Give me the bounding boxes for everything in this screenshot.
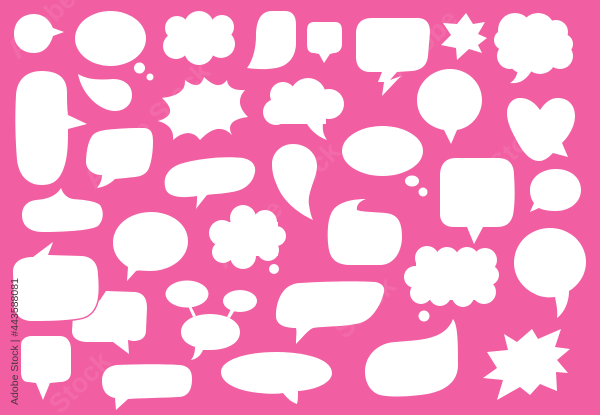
bubble: large left with top tail — [13, 242, 99, 321]
bubble: large cloud with tail — [494, 13, 573, 83]
bubble: rounded rectangle with lower left tail — [86, 128, 153, 188]
bubble: tall pill with right tail — [15, 71, 87, 185]
bubble: cloud centre with tail — [263, 78, 344, 140]
bubble: spiky explosion — [158, 77, 248, 140]
bubble: horizontal thought cloud — [404, 246, 499, 322]
vertical credit text: Adobe Stock | #443588081 — [9, 278, 21, 405]
faint watermark: Stock — [328, 270, 402, 344]
bubbles: linked ellipses — [166, 280, 257, 360]
faint watermark: Adobe Stock — [208, 136, 347, 274]
bubble: wide bubble with tail — [165, 157, 255, 209]
bubble: cloud top — [163, 11, 235, 65]
bubble: round with bottom tail — [417, 69, 482, 144]
bubble: wide bottom pill — [102, 364, 192, 410]
bubble: teardrop top — [247, 11, 296, 69]
faint watermark: Adobe Stock — [78, 56, 217, 194]
bubble: eight point star — [441, 13, 487, 60]
bubble: square with bottom tail — [440, 158, 515, 244]
bubble: flat pill with top spike — [22, 188, 103, 232]
bubble: small rounded square — [307, 22, 342, 63]
bubble: rounded rectangle with lightning tail — [356, 18, 430, 96]
faint watermark: Adobe — [383, 4, 464, 84]
bubble: starburst bottom right — [483, 329, 570, 400]
bubble: lower left square — [21, 336, 71, 400]
bubble: oval with left tail — [113, 212, 188, 281]
bubble: heart — [507, 98, 575, 161]
bubble: small round with right tail — [14, 14, 64, 53]
bubble: thought ellipse with dots right — [342, 126, 428, 196]
bubble: bottom ellipse with tail — [221, 352, 332, 404]
bubble: quote shape — [328, 199, 402, 265]
bubble: thought ellipse with dots — [75, 11, 154, 80]
bubble: square behind — [72, 291, 147, 354]
faint watermark: Stock — [483, 105, 557, 179]
bubble: scalloped thought cloud — [209, 205, 286, 274]
bubble: large teardrop bottom — [365, 319, 458, 396]
bubble: wide centre with tail — [276, 281, 384, 344]
bubble: small oval — [530, 169, 581, 212]
bubble: tall teardrop — [272, 144, 317, 220]
bubble: round with curved tail right — [514, 228, 586, 318]
bubble: horizontal teardrop — [78, 74, 132, 111]
